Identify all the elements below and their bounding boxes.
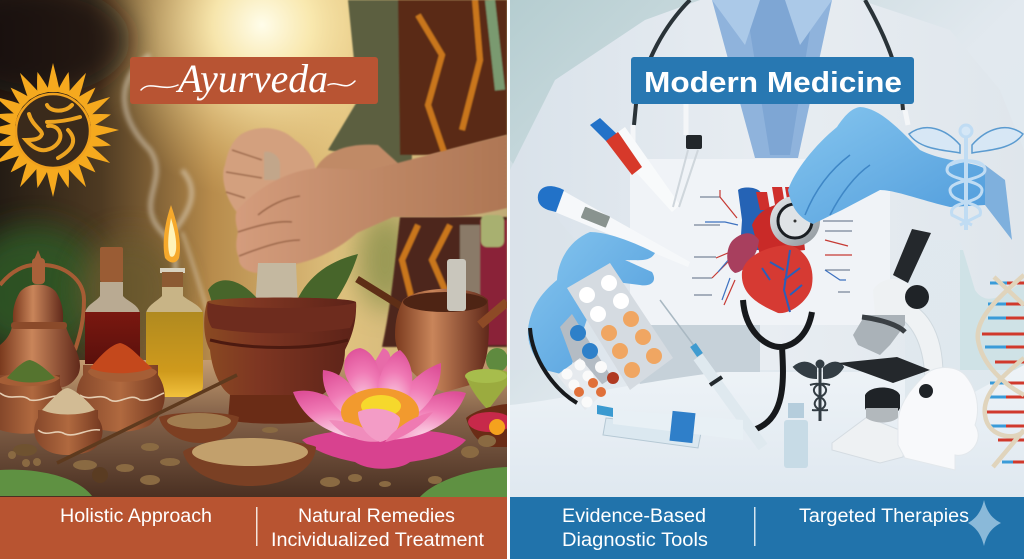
herb bowls <box>57 375 316 486</box>
digital thermometer <box>538 186 630 242</box>
clinical thermometer and roller <box>590 118 702 212</box>
banner: Ayurveda <box>130 56 378 104</box>
vial <box>784 403 808 468</box>
oil bottles and flame <box>85 205 203 397</box>
white cutout model <box>898 368 978 470</box>
smoke <box>120 52 208 313</box>
panel: Ayurveda <box>0 0 512 559</box>
DNA helix <box>978 275 1024 467</box>
syringes <box>597 300 763 448</box>
leaves bottom <box>0 467 507 497</box>
icon: sparkle <box>968 500 1001 546</box>
scattered spices <box>8 427 496 487</box>
banner: Modern Medicine <box>631 57 914 104</box>
table surface <box>510 365 1024 442</box>
panel: Modern Medicine <box>510 0 1024 559</box>
glove left <box>528 232 655 375</box>
icon: caduceus large <box>909 125 1023 230</box>
icon: caduceus small <box>794 360 843 421</box>
heart <box>727 187 813 313</box>
copper pot <box>0 250 84 388</box>
text: holistic approach: Holistic Approach <box>60 506 212 527</box>
text: targeted therapies: Targeted Therapies <box>799 506 969 527</box>
icon: stethoscope <box>743 196 820 430</box>
pill blisters <box>557 263 673 410</box>
doctor coat and shirt <box>510 0 1024 385</box>
footer: Ayurveda <box>0 497 507 559</box>
glove holding stethoscope <box>788 107 990 224</box>
chart: heart diagram paper <box>630 159 890 325</box>
lotus <box>293 348 466 469</box>
mortar with herbs and pestle <box>204 254 358 424</box>
pod, leaf and red bowl <box>465 348 507 447</box>
text: individualized treatment: Incividualized Treatment <box>271 530 485 551</box>
text: evidence-based: Evidence-Based <box>562 506 706 527</box>
stethoscope tube left <box>530 328 577 403</box>
text: natural remedies: Natural Remedies <box>298 506 455 527</box>
microscope <box>832 229 943 463</box>
coat pocket stripe <box>985 165 1012 240</box>
title: Ayurveda: Ayurveda <box>175 56 328 101</box>
icon: sun with symbol <box>0 63 119 197</box>
hands and arms <box>223 128 507 273</box>
footer: Modern Medicine <box>510 497 1024 559</box>
title: Modern Medicine: Modern Medicine <box>644 67 902 99</box>
woman sleeve and sari <box>328 0 507 347</box>
copper vessel with spoon <box>357 259 507 392</box>
table <box>0 360 507 497</box>
text: diagnostic tools: Diagnostic Tools <box>562 530 708 551</box>
clay spice pots <box>0 343 165 455</box>
